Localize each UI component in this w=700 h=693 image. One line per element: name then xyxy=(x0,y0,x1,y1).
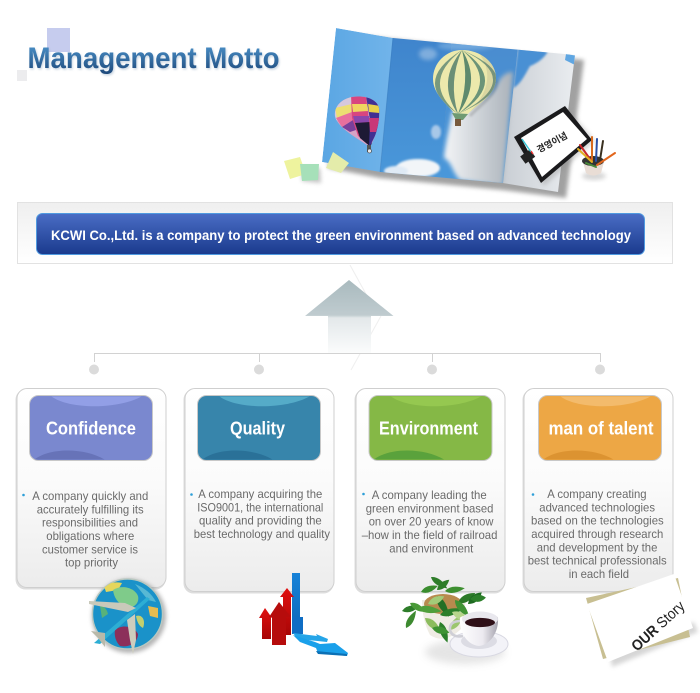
description: Environment: green environment based xyxy=(366,501,493,515)
description: Confidence: obligations where xyxy=(46,529,135,543)
description: Environment: and environment xyxy=(389,541,474,555)
description: man of talent: best technical professionals xyxy=(528,554,667,568)
panel: Environment xyxy=(354,388,505,594)
description: man of talent: in each field xyxy=(569,567,629,581)
heading button: Confidence xyxy=(30,396,152,460)
arrow: upward xyxy=(305,265,394,370)
description: Environment: on over 20 years of know xyxy=(369,515,494,529)
description: man of talent: based on the technologies xyxy=(531,514,664,528)
heading button: Environment xyxy=(369,396,492,460)
panel: man of talent xyxy=(522,388,673,594)
description: Quality: ISO9001, the international xyxy=(197,500,323,514)
icon: striped hot air balloon xyxy=(430,48,500,126)
heading button: man of talent: man of talent xyxy=(548,418,654,438)
saucer xyxy=(450,631,508,657)
airplane xyxy=(89,597,150,654)
heading button: Environment: Environment xyxy=(379,418,478,438)
description: Confidence: accurately fulfilling its xyxy=(37,502,144,516)
description: Confidence xyxy=(22,489,148,570)
plant pot xyxy=(422,598,466,639)
description: Environment xyxy=(362,488,497,555)
leaves xyxy=(401,575,486,644)
icon: globe and airplane xyxy=(89,579,166,654)
heading button: Quality xyxy=(198,396,320,460)
icon: pencil cup xyxy=(578,137,615,180)
icon: our story note cards xyxy=(586,574,698,667)
description: Quality: best technology and quality xyxy=(194,527,330,541)
icon: sticky notes xyxy=(284,152,349,183)
banner bar xyxy=(36,214,644,254)
coffee cup xyxy=(450,621,463,636)
panel: Quality xyxy=(184,388,334,594)
description: man of talent: A company creating xyxy=(547,487,647,501)
description: Confidence: customer service is xyxy=(42,542,138,556)
icon: clipboard with motto: 경영이념 xyxy=(535,130,569,155)
icon: growth chart arrows xyxy=(259,573,348,656)
heading button: man of talent xyxy=(538,396,662,460)
connector lines xyxy=(89,354,605,374)
description: Confidence: top priority xyxy=(65,556,118,570)
panel: mission banner xyxy=(18,202,672,264)
banner text: KCWI Co.,Ltd. is a company to protect the green environment based on advanced technology xyxy=(51,227,631,243)
description: Environment: –how in the field of railroad xyxy=(362,528,497,542)
description: Quality xyxy=(190,487,330,541)
description: Confidence: A company quickly and xyxy=(32,489,148,503)
title: Management Motto xyxy=(28,42,280,75)
decorative square: lavender xyxy=(47,28,70,52)
description: Quality: A company acquiring the xyxy=(198,487,323,501)
description: man of talent: acquired through research xyxy=(531,527,663,541)
description: Confidence: responsibilities and xyxy=(42,516,138,530)
note text: OUR Story xyxy=(628,598,689,655)
icon: clipboard with motto xyxy=(514,106,595,186)
description: Environment: A company leading the xyxy=(372,488,487,502)
decorative square: grey xyxy=(17,70,27,81)
illustration: folded sky brochure xyxy=(322,28,584,198)
title: Management Motto xyxy=(28,44,280,76)
description: man of talent: and development by the xyxy=(537,540,658,554)
icon: plant and coffee cup xyxy=(401,575,508,664)
description: man of talent xyxy=(528,487,667,581)
description: man of talent: advanced technologies xyxy=(539,500,655,514)
heading button: Quality: Quality xyxy=(230,418,285,438)
description: Quality: quality and providing the xyxy=(199,514,322,528)
panel: Confidence xyxy=(16,388,166,590)
heading button: Confidence: Confidence xyxy=(46,418,136,438)
icon: rainbow hot air balloon xyxy=(334,96,380,154)
